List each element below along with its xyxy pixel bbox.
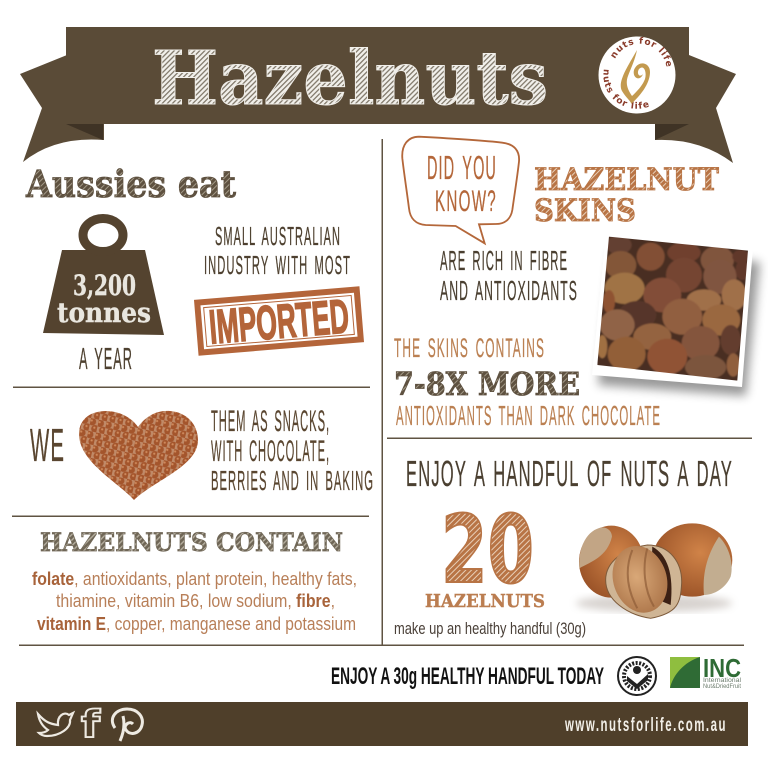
panel: did you know: AND ANTIOXIDANTS [440,275,578,306]
heading: hazelnut skins [534,162,719,229]
panel: handful of nuts [394,453,733,638]
text: them as snacks [211,405,374,496]
label: hazelnuts: HAZELNUTS [425,591,545,612]
banner band [66,27,689,124]
section dividers [12,139,752,646]
stat: 20: 20 [441,496,534,605]
logo: nuts for life [598,36,676,114]
title: Hazelnuts [152,36,548,122]
text: BERRIES AND IN BAKING [211,465,374,496]
text: SMALL AUSTRALIAN [215,221,341,251]
icon: heart of hazelnuts [79,411,198,500]
callout: speech bubble: DID YOU [427,149,497,186]
panel: did you know: ARE RICH IN FIBRE [440,245,568,276]
weight value: 3,200 [73,269,136,302]
photo: hazelnuts with skins [591,230,760,396]
logo: nuts for life: nuts for life [611,37,671,66]
logo: INC: Nut&DriedFruit [703,684,741,690]
panel: did you know: THE SKINS CONTAINS [394,333,545,363]
text: rich in fibre [440,245,578,306]
image: three hazelnuts [576,523,732,620]
icon: facebook: f [81,703,101,746]
nutrient list: folate, antioxidants, plant protein, healthy fats, [32,569,357,589]
stat: 7-8x more: 7-8X MORE [394,365,580,403]
panel: we love hazelnuts [30,405,374,500]
heading: hazelnut skins: SKINS [534,193,636,229]
text: healthy handful: make up an healthy handful (30g) [394,619,586,638]
text: them as snacks: WITH CHOCOLATE, [211,435,330,468]
heading: hazelnut skins: HAZELNUT [534,162,719,198]
stamp: imported: IMPORTED [207,290,351,355]
stamp: imported [197,290,361,355]
footer bar [16,702,748,746]
ribbon folds [66,124,689,140]
icon: twitter [38,713,73,736]
footer call to action [331,653,741,695]
nutrient list: thiamine, vitamin B6, low sodium, fibre, [56,591,335,611]
nutrient list [32,569,357,634]
heading: HAZELNUTS CONTAIN [40,528,343,557]
badge: healthy handful [618,657,656,695]
callout: speech bubble: KNOW? [435,185,497,218]
left ribbon tail [20,55,104,162]
panel: Aussies eat: A YEAR [79,341,133,376]
panel: Aussies eat [25,162,361,376]
panel: we love hazelnuts: WE [30,419,65,471]
logo: nuts for life: nuts for life [603,70,649,109]
weight unit: tonnes [57,298,151,329]
logo: INC: International [703,678,741,684]
callout: speech bubble [402,137,519,243]
icon: pinterest [112,709,142,741]
nutrient list: vitamin E, copper, manganese and potassium [37,614,356,634]
title banner [20,27,736,163]
text: INDUSTRY WITH MOST [204,250,351,280]
right ribbon tail [655,55,736,163]
heading: Aussies eat [25,162,236,206]
panel: hazelnuts contain [32,528,357,634]
logo: INC: INC [703,653,741,683]
logo: INC [670,653,741,690]
text: small australian industry [204,221,351,280]
text: them as snacks: THEM AS SNACKS, [211,405,330,438]
panel: did you know [394,137,760,431]
icon: weight [43,218,164,335]
